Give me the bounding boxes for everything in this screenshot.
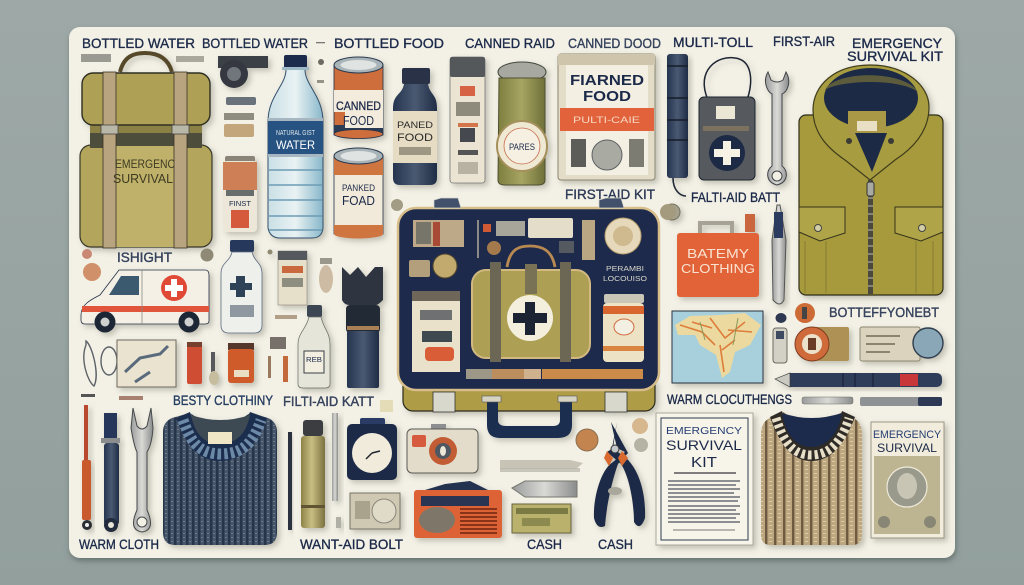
icon: navy sweater [163, 412, 277, 545]
icon: portable radio [414, 481, 502, 538]
icon: open-end wrench [131, 408, 153, 532]
heading: top label row: MULTI-TOLL [673, 34, 753, 50]
icon: first-aid radio [699, 58, 755, 180]
text: want-aid label: WANT-AID BOLT [300, 536, 403, 552]
icon: dark bottle [393, 68, 437, 185]
icon: coins [576, 418, 648, 452]
heading: top label row: BOTTLED FOOD [334, 35, 444, 51]
icon: canned food [334, 57, 383, 138]
text: first-aid kit labels: FIRST-AID KIT [565, 186, 655, 202]
icon: battery box: CLOTHING [681, 261, 755, 276]
case base [403, 375, 655, 438]
icon: ambulance van [81, 270, 209, 332]
icon: dark bottle: FOOD [397, 132, 433, 144]
icon: canned food: CANNED [336, 99, 381, 113]
icon: wrench [765, 72, 789, 185]
small lid label: PERAMBI [606, 264, 644, 273]
icon: medicine bottle [221, 240, 262, 333]
case lid [398, 208, 659, 390]
icon: gadgets beside map [773, 303, 815, 363]
text: first-aid kit labels: FALTI-AID BATT [691, 189, 780, 205]
icon: dark handle tool [101, 413, 120, 532]
icon: coins beside van [82, 248, 214, 281]
icon: second can: FOAD [342, 193, 375, 208]
icon: knife blades [500, 460, 583, 497]
icon: water bottle [268, 55, 323, 238]
text: cash labels: CASH [598, 536, 633, 552]
icon: second can: PANKED [342, 183, 375, 193]
icon: red-handled tool [82, 405, 92, 530]
heading: top label row: BOTTLED WATER [82, 35, 195, 51]
icon: compact camera [407, 424, 478, 473]
icon: jacket [799, 65, 943, 295]
left card stack [412, 291, 460, 372]
icon: battery box [664, 204, 759, 297]
small lid label: LOCOUISO [603, 274, 647, 283]
icon: red tube [187, 342, 219, 385]
icon: dark bottle: PANED [397, 120, 434, 130]
icon: olive jar: PARES [509, 142, 535, 152]
icon: food pouch [558, 54, 655, 180]
icon: heavy flashlight [342, 267, 383, 388]
icon: pen [775, 373, 942, 387]
icon: small orange jar: FINST [229, 201, 252, 208]
text: mid-row labels: FILTI-AID KATT [283, 393, 374, 409]
heading: top label row: FIRST-AIR [773, 33, 835, 49]
icon: white bottle [298, 305, 330, 388]
icon: second can [334, 148, 383, 238]
icon: folding map [672, 311, 763, 383]
icon: lens card [860, 327, 943, 361]
icon: small orange jar [223, 156, 257, 232]
text: first-aid kit labels [565, 186, 780, 205]
heading: top label row: BOTTLED WATER [202, 35, 308, 51]
icon: backpack: EMERGENC [115, 157, 175, 171]
icon: survival booklet: EMERGENCY [873, 429, 942, 441]
icon: battery box: BATEMY [687, 246, 749, 261]
icon: ration pack [268, 250, 307, 305]
icon: tiny fittings [317, 59, 324, 83]
latches on lid top [391, 198, 676, 220]
icon: olive jar [497, 62, 547, 185]
heading: top label row [82, 33, 943, 64]
icon: mini camera device [218, 56, 268, 88]
text: mid-row labels: BESTY CLOTHINY [173, 392, 274, 408]
text: warm cloth label: WARM CLOTH [79, 536, 159, 552]
icon: white bottle: REB [306, 357, 322, 364]
icon: backpack [80, 53, 212, 248]
heading: top label row: SURVIVAL KIT [847, 48, 943, 64]
icon: flashlight [667, 54, 688, 196]
icon: orange jar [228, 343, 254, 383]
icon: survival guide document [656, 413, 753, 545]
heading: top label row: CANNED RAID [465, 35, 555, 51]
icon: backpack: SURVIVAL [113, 171, 173, 186]
text: battery label: BOTTEFFYONEBT [829, 304, 939, 320]
text: cash labels [527, 536, 633, 552]
icon: canned food: FOOD [343, 113, 374, 128]
icon: survival guide document: SURVIVAL [666, 437, 742, 453]
icon: clock [347, 418, 397, 480]
icon: survival guide document: KIT [691, 454, 717, 471]
small lid label [603, 264, 647, 283]
icon: water bottle: NATURAL GIST [276, 130, 316, 137]
bottom strip tools [466, 369, 643, 379]
icon: first-aid case (open lid) [391, 198, 676, 438]
icon: food pouch: FIARNED [570, 72, 644, 89]
icon: metal bars [802, 397, 942, 406]
icon: survival guide document: EMERGENCY [666, 426, 742, 437]
panel: kit layout board [69, 27, 955, 558]
icon: survival booklet [871, 422, 944, 538]
icon: slim pen [288, 432, 292, 530]
text: cash labels: CASH [527, 536, 562, 552]
icon: cash bundle [512, 504, 571, 533]
text: warm clothing label: WARM CLOCUTHENGS [667, 391, 792, 407]
text: mid-row labels [81, 392, 393, 412]
icon: thin steel tool [332, 413, 341, 528]
icon: beige sweater [761, 411, 862, 545]
small items [268, 258, 333, 382]
heading: top label row: EMERGENCY [852, 35, 943, 51]
icon: food pouch: PULTI-CAIE [573, 115, 640, 125]
icon: food pouch: FOOD [583, 88, 631, 105]
inner first-aid pouch [472, 246, 590, 362]
icon: brass cylinder [301, 420, 325, 528]
icon: field photo card [117, 340, 176, 387]
icon: water bottle: WATER [276, 138, 315, 152]
icon: tube container [450, 57, 485, 183]
small parts cluster [81, 54, 256, 137]
icon: pliers [594, 422, 645, 527]
icon: compass badge [795, 327, 849, 361]
icon: clips and loops [84, 341, 117, 386]
text: flashlight label: ISHIGHT [117, 249, 172, 265]
right jar [603, 294, 644, 362]
icon: screwdriver [772, 205, 786, 304]
icon: survival booklet: SURVIVAL [877, 441, 937, 455]
lid contents top row [409, 218, 641, 278]
icon: banknote [350, 493, 400, 529]
heading: top label row: CANNED DOOD [568, 35, 661, 51]
